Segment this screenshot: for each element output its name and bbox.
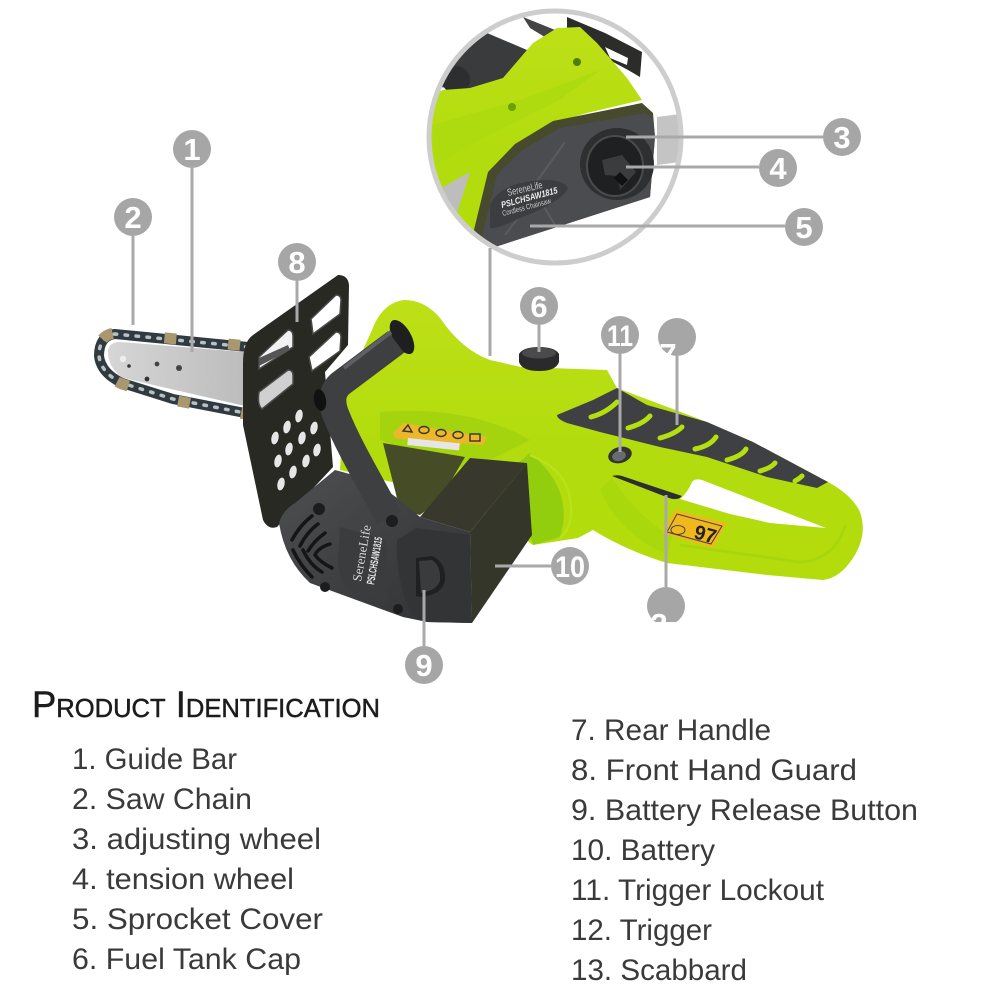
trigger [612,475,682,499]
number 12 (clipped): 2 [650,607,668,642]
number 12 (clipped) [647,587,685,622]
battery release button [416,556,445,597]
callout lines for detail circle [490,137,823,356]
rear guard and knob behind body [440,17,642,94]
number 8 [278,243,316,281]
SereneLife label: SereneLife [506,180,544,199]
battery pack and motor housing: SereneLife [349,524,374,583]
number 6 [520,287,558,325]
parts list: right column: 9. Battery Release Button [571,794,918,827]
number 4: 4 [769,151,787,186]
number 1: 1 [183,132,201,167]
trigger lockout button [606,444,634,466]
number 2: 2 [124,200,142,235]
magnified detail circle [420,5,690,270]
battery pack and motor housing [279,443,532,623]
number 10: 10 [555,551,585,584]
guide bar and saw chain [97,333,248,414]
parts list: left column: 4. tension wheel [72,863,294,896]
parts list: right column: 7. Rear Handle [571,714,771,747]
parts list: right column: 10. Battery [571,834,715,867]
SereneLife label: Cordless Chainsaw [501,196,552,218]
number 3 [823,118,861,156]
number 2 [114,198,152,236]
sprocket cover [473,103,655,247]
parts list: left column: 1. Guide Bar [72,743,237,776]
parts list: left column: 6. Fuel Tank Cap [72,943,301,976]
callout lines [133,168,677,646]
number 3: 3 [833,120,851,155]
number 7 (clipped) [658,318,696,356]
battery pack and motor housing: PSLCHSAW1815 [365,536,385,586]
green body detail [432,27,642,230]
SereneLife label [490,180,568,228]
parts list: right column: 8. Front Hand Guard [571,754,857,787]
number 4 [759,149,797,187]
guide bar stub [657,114,680,165]
number 5: 5 [795,210,813,245]
front handle [312,316,419,527]
number 8: 8 [288,245,306,280]
parts list: left column: 2. Saw Chain [72,783,252,816]
number 7 (clipped): 7 [659,337,677,372]
green body and rear handle [340,300,863,580]
warning stickers: 97 [692,522,719,549]
tension wheel [580,128,654,200]
front hand guard [243,275,349,528]
SereneLife label: PSLCHSAW1815 [500,185,559,210]
number 5 [785,208,823,246]
parts list: left column [72,743,323,976]
parts list: right column [571,714,918,987]
parts list: left column: 3. adjusting wheel [72,823,321,856]
number 6: 6 [530,289,548,324]
number 1 [173,130,211,168]
parts list: right column: 11. Trigger Lockout [571,874,825,907]
number 9 [405,646,443,684]
parts list: right column: 13. Scabbard [571,954,747,987]
chainsaw: main product image [97,275,863,623]
number 9: 9 [415,648,433,683]
grip [557,388,828,488]
fuel tank cap [519,347,559,371]
heading: product identification: Product Identification [32,684,380,725]
warning stickers [393,423,727,549]
parts list: right column: 12. Trigger [571,914,712,947]
parts list: left column: 5. Sprocket Cover [72,903,323,936]
number 11: 11 [607,320,633,353]
